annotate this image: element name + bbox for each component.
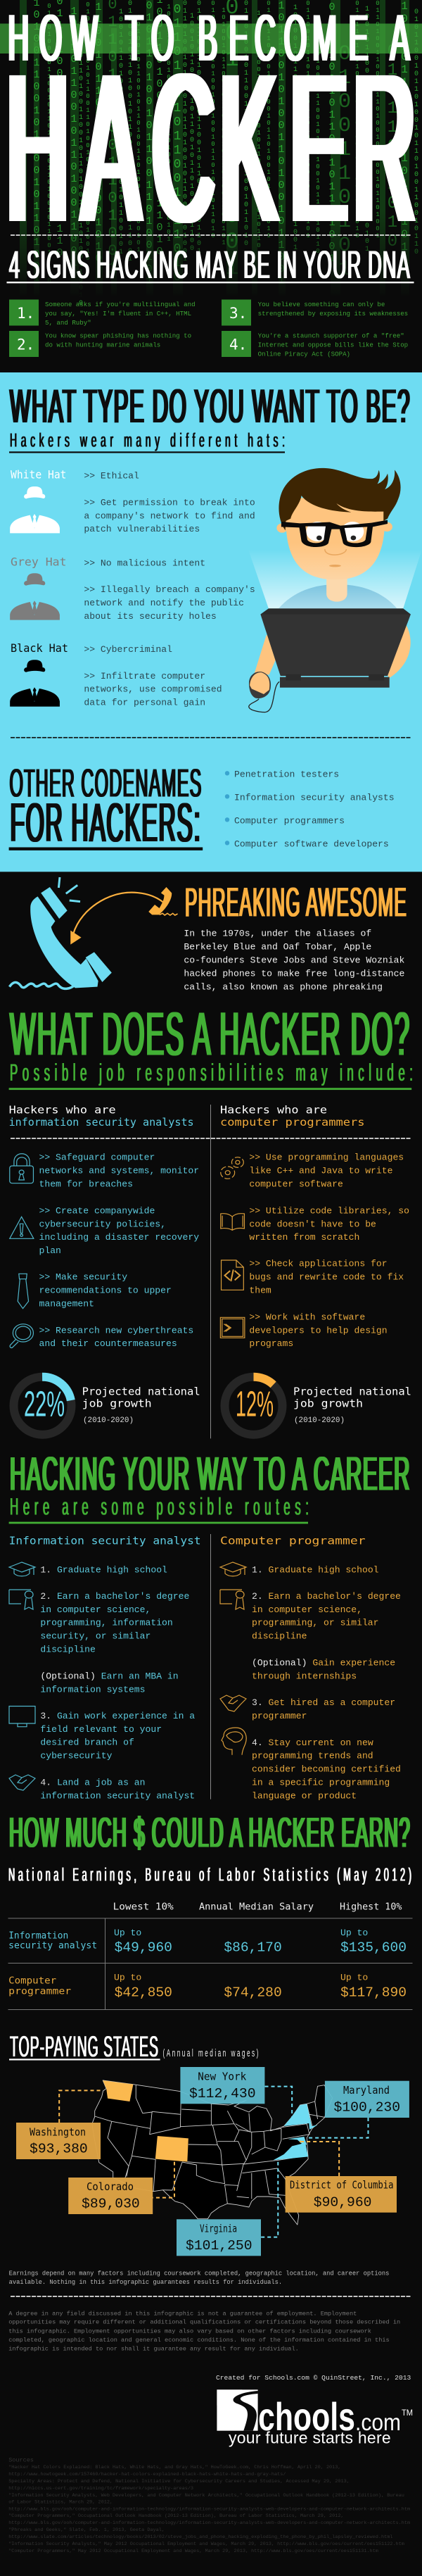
callout: Maryland: Maryland — [343, 2084, 390, 2097]
icon: white hat — [10, 486, 60, 533]
analyst duties: and their countermeasures — [39, 1338, 177, 1349]
white hat text: a company's network to find and — [84, 510, 255, 521]
panel: matrix rain background: 0101101001011001101001011001011010010 — [84, 1, 91, 262]
panel: matrix rain background: 0101100110100101100101101001011010 — [210, 0, 217, 239]
analyst route steps: 1. — [40, 1564, 57, 1575]
panel: matrix rain background: 0100110100101100101101001011001011 — [265, 0, 272, 239]
codename list: Computer software developers — [234, 838, 389, 849]
programmer duties: computer software — [249, 1179, 343, 1189]
white hat label: White Hat — [11, 467, 66, 481]
icon: diploma — [220, 1590, 244, 1609]
icon: warning — [10, 1217, 34, 1238]
route header: analyst: Information security analyst — [9, 1534, 201, 1547]
icon: code file — [222, 1260, 243, 1290]
programmer duties: programs — [249, 1338, 293, 1349]
icons: programmer route — [220, 1562, 246, 1755]
panel: matrix rain background: 01011001010 — [383, 42, 402, 251]
divider — [11, 737, 411, 739]
row: computer programmer: $42,850 — [115, 1985, 172, 2001]
row: computer programmer: $117,890 — [340, 1985, 407, 2001]
analyst duties: networks and systems, monitor — [39, 1166, 199, 1176]
analyst route steps: cybersecurity — [40, 1751, 113, 1761]
panel: matrix rain background: 10010110010110100101100110100101 — [363, 6, 371, 253]
table headers: Annual Median Salary — [199, 1902, 314, 1913]
disclaimer: this infographic. Employment opportunities may also vary based on other factors including coursework — [8, 2327, 371, 2335]
sign 3: 3. — [229, 305, 247, 322]
programmer duties: >> Utilize code libraries, so — [249, 1205, 409, 1216]
illustration: hacker at laptop — [248, 468, 422, 712]
sources: "Computer Programmers," Occupational Outlook Handbook (2012-13 Edition), Bureau of Labor Statistics, March 29, 2012, — [8, 2513, 344, 2519]
divider — [11, 2296, 411, 2297]
grey hat text: >> Illegally breach a company's — [84, 584, 255, 595]
icon: gears — [221, 1157, 243, 1179]
panel: matrix rain background: 01011001011010010110100110010110 — [412, 8, 421, 256]
icon: padlock — [10, 1154, 33, 1183]
analyst route steps: in computer science, — [40, 1604, 151, 1615]
sources: Sources — [8, 2457, 34, 2464]
logo tagline: your future starts here — [229, 2429, 391, 2447]
analyst route steps: Gain work experience in a — [57, 1711, 195, 1721]
analyst route steps: 2. — [40, 1591, 57, 1602]
table headers: Lowest 10% — [113, 1902, 174, 1913]
panel: matrix rain background: 10010110100110010110100101100101 — [117, 8, 125, 256]
route header: programmer: Computer programmer — [220, 1534, 366, 1547]
white hat text: >> Ethical — [84, 470, 139, 481]
panel: matrix rain background: 0110101001101001 — [104, 0, 121, 277]
table: earnings — [8, 1902, 412, 2010]
column header: analysts: information security analysts — [9, 1116, 194, 1129]
row: computer programmer: Computer — [8, 1976, 56, 1987]
sign 4: You're a staunch supporter of a "free" — [258, 332, 404, 339]
analyst route steps: field relevant to your — [40, 1724, 162, 1735]
panel: matrix rain background: 1100101101001011001010 — [93, 1, 104, 265]
panel: matrix rain background: 0110100101100101101001011010010110010110 — [46, 3, 53, 284]
black hat text: data for personal gain — [84, 698, 205, 708]
callout: Virginia — [177, 2219, 261, 2256]
analyst route steps: programming, information — [40, 1618, 173, 1628]
signs list — [9, 300, 408, 358]
programmer route steps: Earn a bachelor's degree — [269, 1591, 401, 1602]
callout: New York: $112,430 — [189, 2086, 256, 2101]
subheading: national earnings: National Earnings, Bureau of Labor Statistics (May 2012) — [8, 1866, 411, 1885]
panel: matrix rain background: 1001011001011010011001 — [68, 6, 80, 269]
panel: matrix rain background: 0110010110100101100101101001011001 — [127, 0, 134, 263]
panel: matrix rain background: 01101001011001011010 — [170, 3, 184, 284]
programmer route steps: Get hired as a computer — [269, 1697, 395, 1708]
row: information security analyst: security analyst — [8, 1941, 97, 1952]
programmer duties: developers to help design — [249, 1325, 388, 1336]
programmer route steps: (Optional) — [252, 1657, 312, 1668]
callout: Colorado: $89,030 — [82, 2197, 140, 2212]
sign 2: You know spear phishing has nothing to — [45, 332, 191, 339]
analyst route steps: 4. — [40, 1778, 57, 1788]
chart: 22 percent donut — [14, 1377, 72, 1435]
analyst duties: >> Create companywide — [39, 1205, 155, 1216]
icon: grey hat — [10, 573, 60, 620]
panel: matrix rain background: 101100101001101001011001 — [276, 0, 287, 287]
sources: "Phreaks and Geeks," Slate, Feb. 1, 2013, Geeta Dayal, — [8, 2527, 165, 2533]
underline — [9, 848, 203, 850]
programmer route steps: Graduate high school — [269, 1564, 379, 1575]
analyst route steps: information systems — [40, 1684, 146, 1695]
grey hat text: about its security holes — [84, 611, 217, 622]
analyst duties: them for breaches — [39, 1179, 133, 1189]
black hat label: Black Hat — [11, 641, 68, 655]
callout: Virginia: Virginia — [200, 2223, 237, 2235]
table headers — [113, 1902, 402, 1913]
programmer duties: >> Work with software — [249, 1312, 365, 1322]
analyst route steps: desired branch of — [40, 1738, 134, 1748]
panel: matrix rain background: 101001100101100101101001 — [31, 0, 42, 284]
analyst duties: plan — [39, 1245, 61, 1256]
icon: ringing phone with arrow — [9, 877, 178, 988]
icon: tie — [18, 1274, 29, 1309]
panel: matrix rain background: 1010010110010110100110100101100101 — [135, 14, 142, 253]
logo: Schools.com — [217, 2389, 413, 2447]
analyst route steps: Earn an MBA in — [101, 1671, 179, 1681]
analyst route steps: discipline — [40, 1645, 96, 1655]
white hat block — [10, 467, 255, 534]
callout: Washington: Washington — [30, 2125, 86, 2138]
black hat text: networks, use compromised — [84, 684, 222, 695]
column header: programmers: computer programmers — [220, 1116, 365, 1129]
green title band — [0, 24, 422, 54]
sign 3: You believe something can only be — [258, 301, 385, 308]
table headers: Highest 10% — [340, 1902, 402, 1913]
codename list: Computer programmers — [234, 815, 345, 826]
analyst duties: >> Make security — [39, 1272, 127, 1283]
panel: matrix rain background: 00101101001 — [219, 0, 245, 281]
growth label: programmers: Projected national — [293, 1386, 411, 1398]
panel: matrix rain background: 0101100110100101100101101001011010 — [196, 0, 203, 263]
column header: programmers: Hackers who are — [220, 1104, 327, 1117]
programmer duties: like C++ and Java to write — [249, 1166, 392, 1176]
sign 1: Someone asks if you're multilingual and — [45, 301, 196, 308]
sources: http://www.bls.gov/ooh/computer-and-information-technology/information-security-analysts-web-developers-and-computer-network-architects.htm — [8, 2506, 410, 2512]
row: computer programmer: Up to — [340, 1973, 368, 1983]
grey hat label: Grey Hat — [11, 555, 66, 568]
icon: graduation cap — [9, 1562, 35, 1576]
black hat block — [10, 641, 222, 708]
sign 4: Internet and oppose bills like the Stop — [258, 341, 408, 349]
sign 1 — [9, 300, 196, 327]
column header: analysts: Hackers who are — [9, 1104, 116, 1117]
sources: http://niccs.us-cert.gov/training/tc/framework/specialty-areas/3 — [8, 2486, 193, 2492]
sign 1: 1. — [17, 305, 34, 322]
icon: black hat — [10, 660, 60, 707]
phreaking text: hacked phones to make free long-distance — [184, 968, 404, 979]
disclaimer: A degree in any field discussed in this infographic is not a guarantee of employment. Employment — [8, 2310, 357, 2317]
panel: matrix rain background: 0110100110010110100110 — [53, 0, 66, 259]
programmer route steps: Stay current on new — [269, 1738, 373, 1748]
phreaking text: co-founders Steve Jobs and Steve Wozniak — [184, 955, 404, 965]
disclaimer: completed, geographic location and general economic conditions. None of the information contained in this — [8, 2337, 390, 2344]
sign 4: 4. — [229, 337, 247, 353]
subheading: hats: Hackers wear many different hats: — [10, 429, 285, 451]
growth label: programmers: job growth — [293, 1397, 363, 1409]
analyst route steps: security, or similar — [40, 1631, 151, 1642]
icon: diploma — [9, 1590, 33, 1609]
disclaimer: infographic is intended to nor shall it guarantee any result for any individual. — [8, 2346, 299, 2353]
sign 1: you say, "Yes! I'm fluent in C++, HTML — [45, 310, 191, 318]
sources: Specialty Areas: Protect and Defend, National Initiative for Cybersecurity Careers and Studies, Accessed May 29, 2013, — [8, 2479, 350, 2484]
panel: matrix rain background: 10100110010110100101 — [398, 0, 411, 253]
row: computer programmer: programmer — [8, 1986, 71, 1997]
panel: matrix rain background: 0100110101 — [333, 42, 357, 282]
row: information security analyst: $49,960 — [115, 1940, 172, 1956]
panel: matrix rain background — [0, 0, 422, 308]
sign 1: 5, and Ruby" — [45, 319, 91, 327]
analyst duties: cybersecurity policies, — [39, 1219, 166, 1229]
logo wordmark: chools — [258, 2394, 355, 2439]
sources: "Hacker Hat Colors Explained: Black Hats, White Hats, and Gray Hats," HowToGeek.com, Chris Hoffman, April 20, 2013, — [8, 2465, 340, 2470]
sign 3: strengthened by exposing its weaknesses — [258, 310, 408, 318]
grey hat block — [10, 555, 255, 622]
icon: handshake — [220, 1695, 246, 1711]
callout: Maryland: $100,230 — [333, 2099, 400, 2115]
white hat text: patch vulnerabilities — [84, 524, 200, 534]
sign 2: do with hunting marine animals — [45, 341, 160, 349]
panel: matrix rain background: 10100101100101101001100101101001 — [291, 4, 300, 252]
grey hat text: network and notify the public — [84, 598, 244, 608]
growth label: analysts — [82, 1386, 200, 1425]
growth label: analysts: (2010-2020) — [83, 1416, 134, 1425]
divider — [11, 234, 411, 236]
sign 3 — [222, 300, 408, 325]
black hat text: >> Cybercriminal — [84, 644, 172, 655]
programmer duties: >> Use programming languages — [249, 1152, 404, 1163]
chart: 12 percent donut — [225, 1377, 283, 1435]
icon: open book — [221, 1214, 244, 1230]
row: information security analyst: $86,170 — [224, 1940, 282, 1956]
sign 2: 2. — [17, 337, 34, 353]
phreaking text: Berkeley Blue and Oaf Tobar, Apple — [184, 941, 371, 952]
panel: matrix rain background: 010110100101100110100101 — [143, 0, 155, 287]
programmer duties: written from scratch — [249, 1232, 359, 1243]
heading: top-paying states: (Annual median wages) — [163, 2047, 258, 2059]
subheading: responsibilities: Possible job responsibilities may include: — [10, 1060, 413, 1086]
callout: Washington — [16, 2123, 101, 2159]
panel: cyan hats section — [0, 372, 422, 872]
analyst duties: management — [39, 1299, 94, 1309]
title: hacker: HACKER — [6, 30, 416, 266]
icon: head with brain — [222, 1728, 246, 1755]
black hat text: >> Infiltrate computer — [84, 671, 205, 681]
icon: terminal — [220, 1317, 245, 1338]
panel: matrix rain background: 0110100101100101101001 — [326, 1, 338, 265]
earnings note: available. Nothing in this infographic guarantees results for individuals. — [9, 2279, 282, 2286]
icons: programmer duties — [220, 1157, 245, 1338]
programmer route steps: in computer science, — [252, 1604, 362, 1615]
callout: District of Columbia — [286, 2176, 397, 2213]
row: computer programmer — [8, 1973, 407, 2001]
panel: matrix rain background: 0110010110100101101001100101100101 — [305, 0, 312, 239]
row: computer programmer: Up to — [114, 1973, 141, 1983]
icon: monitor — [9, 1707, 35, 1727]
sources: "Computer Programmers," May 2012 Occupational Employment and Wages, March 29, 2013, http://www.bls.gov/oes/current/oes151131.htm — [8, 2549, 378, 2554]
programmer route steps: 3. — [252, 1697, 269, 1708]
programmer route steps: language or product — [252, 1791, 357, 1802]
callout: Maryland — [325, 2081, 409, 2118]
chart: 22 percent donut: 22% — [24, 1384, 65, 1424]
sign 4 — [222, 331, 408, 358]
analyst route steps: Earn a bachelor's degree — [57, 1591, 189, 1602]
programmer duties: bugs and rewrite code to fix — [249, 1272, 404, 1283]
programmer duties: >> Check applications for — [249, 1259, 388, 1269]
row: information security analyst: $135,600 — [340, 1940, 407, 1956]
sources: http://www.howtogeek.com/157460/hacker-hat-colors-explained-black-hats-white-hats-and-gray-hats/ — [8, 2472, 286, 2477]
heading: top-paying states: TOP-PAYING STATES — [10, 2030, 159, 2063]
analyst duties: >> Safeguard computer — [39, 1152, 155, 1163]
disclaimer: opportunities may require different or additional qualifications or certifications beyond those described in — [8, 2319, 400, 2326]
chart: 12 percent donut: 12% — [236, 1384, 274, 1424]
sources: http://www.slate.com/articles/technology/books/2013/02/steve_jobs_and_phone_hacking_exploding_the_phone_by_phil_lapsley_reviewed.html — [8, 2534, 392, 2540]
codename list: Information security analysts — [234, 792, 395, 803]
column divider — [210, 1105, 211, 1438]
programmer route steps: in a specific programming — [252, 1778, 390, 1788]
icons: analyst duties — [10, 1154, 34, 1347]
panel: matrix rain background: 1001011010011001011010010110100110010 — [77, 21, 84, 308]
callout: Colorado: Colorado — [87, 2180, 134, 2193]
panel: matrix rain background: 1001101001011001011010010110010110 — [314, 15, 321, 255]
callout: New York — [180, 2067, 264, 2104]
analyst route steps: Land a job as an — [57, 1778, 146, 1788]
logo wordmark: TM — [402, 2408, 413, 2418]
icon: handshake — [9, 1775, 35, 1790]
analyst route steps: 3. — [40, 1711, 57, 1721]
programmer route steps: through internships — [252, 1671, 357, 1681]
row: information security analyst: Up to — [340, 1928, 368, 1938]
panel: matrix rain background: 1001011001011010010110100110010110 — [255, 10, 262, 249]
programmer duties: them — [249, 1286, 271, 1296]
sources: "Information Security Analysts, Web Developers, and Computer Network Architects," Occupational Outlook Handbook (2012-13 Edition), Bureau — [8, 2493, 404, 2499]
growth label: programmers — [293, 1386, 411, 1425]
programmer route steps: consider becoming certified — [252, 1764, 401, 1775]
panel: matrix rain background: 0110100101100101101001011001101001 — [181, 0, 188, 263]
sources: http://www.bls.gov/ooh/computer-and-information-technology/information-security-analysts-web-developers-and-computer-network-architects.htm — [8, 2520, 410, 2526]
callout: District of Columbia: $90,960 — [314, 2194, 372, 2210]
icon: magnifier — [10, 1324, 33, 1347]
panel: matrix rain background: 1001011010010110010110100101100 — [188, 13, 196, 253]
sources: of Labor Statistics, March 29, 2012, — [8, 2499, 113, 2505]
row: computer programmer: $74,280 — [224, 1985, 282, 2001]
panel: phreaking awesome — [9, 877, 407, 992]
phreaking text: calls, also known as phone phreaking — [184, 981, 383, 992]
logo wordmark: .com — [355, 2409, 401, 2435]
panel: matrix rain background: 0101101001011001101001011001011010 — [354, 0, 361, 239]
programmer route steps: programming, or similar — [252, 1618, 379, 1628]
growth label: analysts: job growth — [82, 1397, 152, 1409]
analyst route steps: Graduate high school — [57, 1564, 167, 1575]
callout: New York: New York — [198, 2070, 246, 2082]
row: information security analyst: Up to — [114, 1928, 141, 1938]
map: United States — [59, 2080, 368, 2237]
heading: other codenames — [9, 761, 203, 853]
white hat text: >> Get permission to break into — [84, 497, 255, 508]
credit: Created for Schools.com © QuinStreet, Inc., 2013 — [216, 2374, 411, 2382]
codename list — [225, 769, 395, 849]
analyst duties: including a disaster recovery — [39, 1232, 199, 1243]
column header: analysts — [9, 1104, 194, 1129]
panel: matrix rain background: 1010010110010110100101101001100101 — [220, 7, 227, 246]
programmer route steps: 1. — [252, 1564, 269, 1575]
panel: matrix rain background: 0110100110010110100101100101101001 — [374, 0, 381, 239]
analyst duties: recommendations to upper — [39, 1286, 172, 1296]
sign 2 — [9, 331, 191, 357]
programmer duties: code doesn't have to be — [249, 1219, 376, 1229]
programmer route steps: 4. — [252, 1738, 269, 1748]
callout: District of Columbia: District of Columbia — [290, 2179, 394, 2192]
programmer route steps: discipline — [252, 1631, 307, 1642]
title: how to become a: HOW TO BECOME A — [8, 1, 410, 75]
analyst duties: >> Research new cyberthreats — [39, 1325, 193, 1336]
column divider — [210, 1534, 211, 1799]
programmer route steps: programming trends and — [252, 1751, 373, 1761]
column header: programmers — [220, 1104, 365, 1129]
panel: matrix rain background: 1001101001011001011010010110100101 — [165, 4, 172, 243]
callout: Virginia: $101,250 — [186, 2238, 252, 2254]
row: information security analyst: Information — [8, 1930, 68, 1941]
phreaking text: In the 1970s, under the aliases of — [184, 928, 371, 938]
programmer route steps: Gain experience — [312, 1657, 395, 1668]
callout: Washington: $93,380 — [30, 2141, 88, 2156]
callout: Colorado — [68, 2178, 153, 2214]
analyst route steps: (Optional) — [40, 1671, 101, 1681]
grey hat text: >> No malicious intent — [84, 558, 205, 568]
sign 4: Online Piracy Act (SOPA) — [258, 351, 350, 358]
earnings note: Earnings depend on many factors including coursework completed, geographic location, and career options — [9, 2270, 389, 2277]
sources: "Information Security Analysts," May 2012 Occupational Employment and Wages, March 29, 2013, http://www.bls.gov/oes/current/oes151122.htm — [8, 2542, 404, 2547]
icons: analyst route — [9, 1562, 35, 1790]
panel: matrix rain background: 1001101001011001011010 — [153, 0, 166, 258]
icon: graduation cap — [220, 1562, 246, 1576]
analyst route steps: information security analyst — [40, 1791, 195, 1802]
programmer route steps: programmer — [252, 1711, 307, 1721]
divider — [11, 1138, 411, 1139]
panel: matrix rain background: 01101001011001101001011001011010 — [242, 0, 250, 248]
row: information security analyst — [8, 1928, 407, 1956]
programmer route steps: 2. — [252, 1591, 269, 1602]
growth label: programmers: (2010-2020) — [294, 1416, 345, 1425]
logo mark — [217, 2389, 258, 2431]
growth label: analysts: Projected national — [82, 1386, 200, 1398]
codename list: Penetration testers — [234, 769, 339, 779]
subheading: routes: Here are some possible routes: — [10, 1493, 309, 1520]
